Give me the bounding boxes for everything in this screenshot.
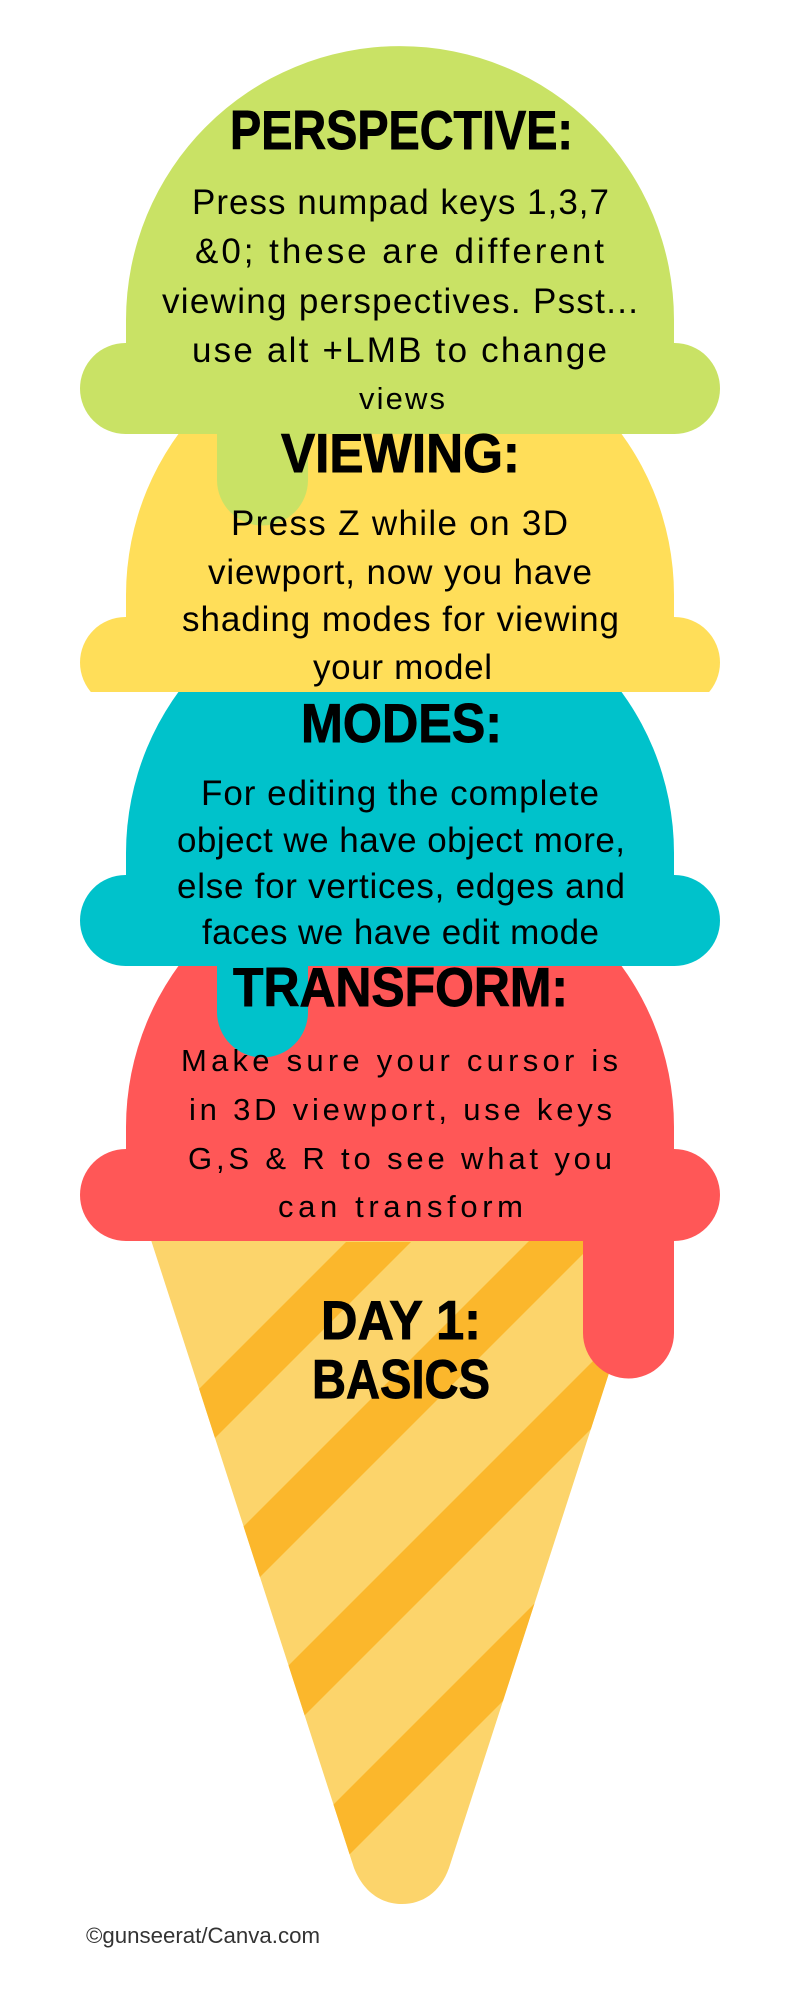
credit line: ©gunseerat/Canva.com (86, 1923, 320, 1948)
heading: viewing: VIEWING: (281, 422, 520, 484)
text block: transform: Make sure your cursor is (181, 1043, 618, 1078)
text block: transform: G,S & R to see what you (188, 1141, 612, 1176)
text block: perspective: viewing perspectives. Psst... (162, 282, 638, 321)
title: day 1 basics: BASICS (312, 1348, 490, 1410)
text block: modes: faces we have edit mode (202, 913, 599, 952)
text block: perspective: Press numpad keys 1,3,7 (192, 183, 609, 222)
text block: transform: in 3D viewport, use keys (189, 1092, 612, 1127)
text block: perspective: use alt +LMB to change (192, 331, 607, 370)
icon: striped cone (151, 1241, 609, 1904)
text block: modes: else for vertices, edges and (177, 867, 625, 906)
text block: modes: object we have object more, (177, 821, 625, 860)
text block: transform (181, 1043, 618, 1224)
infographic: ice cream cone (80, 46, 720, 1948)
heading: modes: MODES: (301, 692, 502, 754)
text block: perspective: &0; these are different (195, 232, 604, 271)
text block: perspective (162, 183, 638, 416)
text block: viewing: Press Z while on 3D (231, 504, 568, 543)
text block: modes (177, 774, 625, 952)
text block: perspective: views (359, 381, 445, 416)
text block: viewing: your model (313, 648, 492, 687)
scoop: green (80, 46, 720, 526)
text block: transform: can transform (278, 1189, 523, 1224)
text block: viewing (182, 504, 619, 687)
scoop: teal (80, 579, 720, 1058)
heading: transform: TRANSFORM: (233, 956, 568, 1018)
text block: modes: For editing the complete (201, 774, 599, 813)
text block: viewing: viewport, now you have (208, 553, 592, 592)
title: day 1 basics: DAY 1: (321, 1289, 481, 1351)
scoop: yellow (80, 434, 720, 692)
title: day 1 basics (312, 1289, 490, 1410)
heading: perspective: PERSPECTIVE: (230, 99, 573, 161)
text block: viewing: shading modes for viewing (182, 600, 619, 639)
scoop: red (80, 853, 720, 1378)
